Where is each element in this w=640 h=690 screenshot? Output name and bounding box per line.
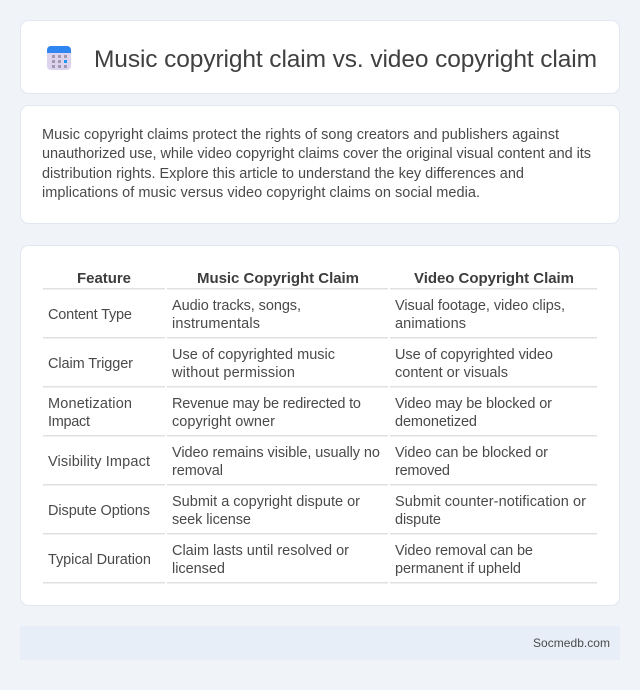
row: visibility impact: removed <box>395 463 450 479</box>
row: claim trigger: Use of copyrighted video <box>395 347 553 363</box>
row: dispute options <box>48 494 586 528</box>
row: typical duration: licensed <box>172 561 225 577</box>
row: monetization impact: Monetization <box>48 396 132 412</box>
row: typical duration: permanent if upheld <box>395 561 521 577</box>
row: monetization impact <box>48 396 552 430</box>
row: monetization impact: Revenue may be redirected to <box>172 396 361 412</box>
row: visibility impact: Visibility Impact <box>48 454 150 470</box>
table header: Feature <box>77 270 131 287</box>
title: Music copyright claim vs. video copyright claim <box>94 46 597 73</box>
row: dispute options: Submit counter-notification or <box>395 494 586 510</box>
row: claim trigger: Use of copyrighted music <box>172 347 335 363</box>
row: content type: Audio tracks, songs, <box>172 298 301 314</box>
row: typical duration: Claim lasts until resolved or <box>172 543 349 559</box>
row: content type: animations <box>395 316 466 332</box>
row: content type <box>48 298 565 332</box>
icon: calendar <box>47 46 71 70</box>
row: visibility impact: Video remains visible, usually no <box>172 445 380 461</box>
row: claim trigger: Claim Trigger <box>48 356 133 372</box>
panel: header <box>20 20 620 94</box>
row: dispute options: dispute <box>395 512 441 528</box>
text block: introduction: Music copyright claims protect the rights of song creators and publishers against <box>42 127 559 143</box>
table header <box>77 270 574 287</box>
row: monetization impact: Video may be blocked or <box>395 396 552 412</box>
row: visibility impact: Video can be blocked or <box>395 445 548 461</box>
text block: introduction: unauthorized use, while video copyright claims cover the original visual content and its <box>42 146 591 162</box>
row: typical duration: Typical Duration <box>48 552 151 568</box>
footer credit: Socmedb.com <box>533 636 610 650</box>
row: visibility impact <box>48 445 548 479</box>
row: typical duration <box>48 543 533 577</box>
row: monetization impact: copyright owner <box>172 414 275 430</box>
row: dispute options: Dispute Options <box>48 503 150 519</box>
row: claim trigger: content or visuals <box>395 365 508 381</box>
row: dispute options: seek license <box>172 512 251 528</box>
row: monetization impact: Impact <box>48 414 90 430</box>
footer <box>20 626 620 660</box>
panel: comparison table <box>20 246 620 606</box>
row: claim trigger <box>48 347 553 381</box>
table header: Music Copyright Claim <box>197 270 359 287</box>
panel: introduction <box>20 106 620 224</box>
row: claim trigger: without permission <box>171 365 295 381</box>
text block: introduction: implications of music versus video copyright claims on social media. <box>42 185 480 201</box>
row: monetization impact: demonetized <box>395 414 477 430</box>
row: visibility impact: removal <box>172 463 223 479</box>
row: typical duration: Video removal can be <box>395 543 533 559</box>
row: dispute options: Submit a copyright dispute or <box>172 494 360 510</box>
row: content type: instrumentals <box>172 316 260 332</box>
text block: introduction: distribution rights. Explore this article to understand the key differences and <box>42 166 524 182</box>
row: content type: Visual footage, video clips, <box>395 298 565 314</box>
text block: introduction <box>42 127 591 201</box>
table header: Video Copyright Claim <box>414 270 574 287</box>
row: content type: Content Type <box>48 307 132 323</box>
